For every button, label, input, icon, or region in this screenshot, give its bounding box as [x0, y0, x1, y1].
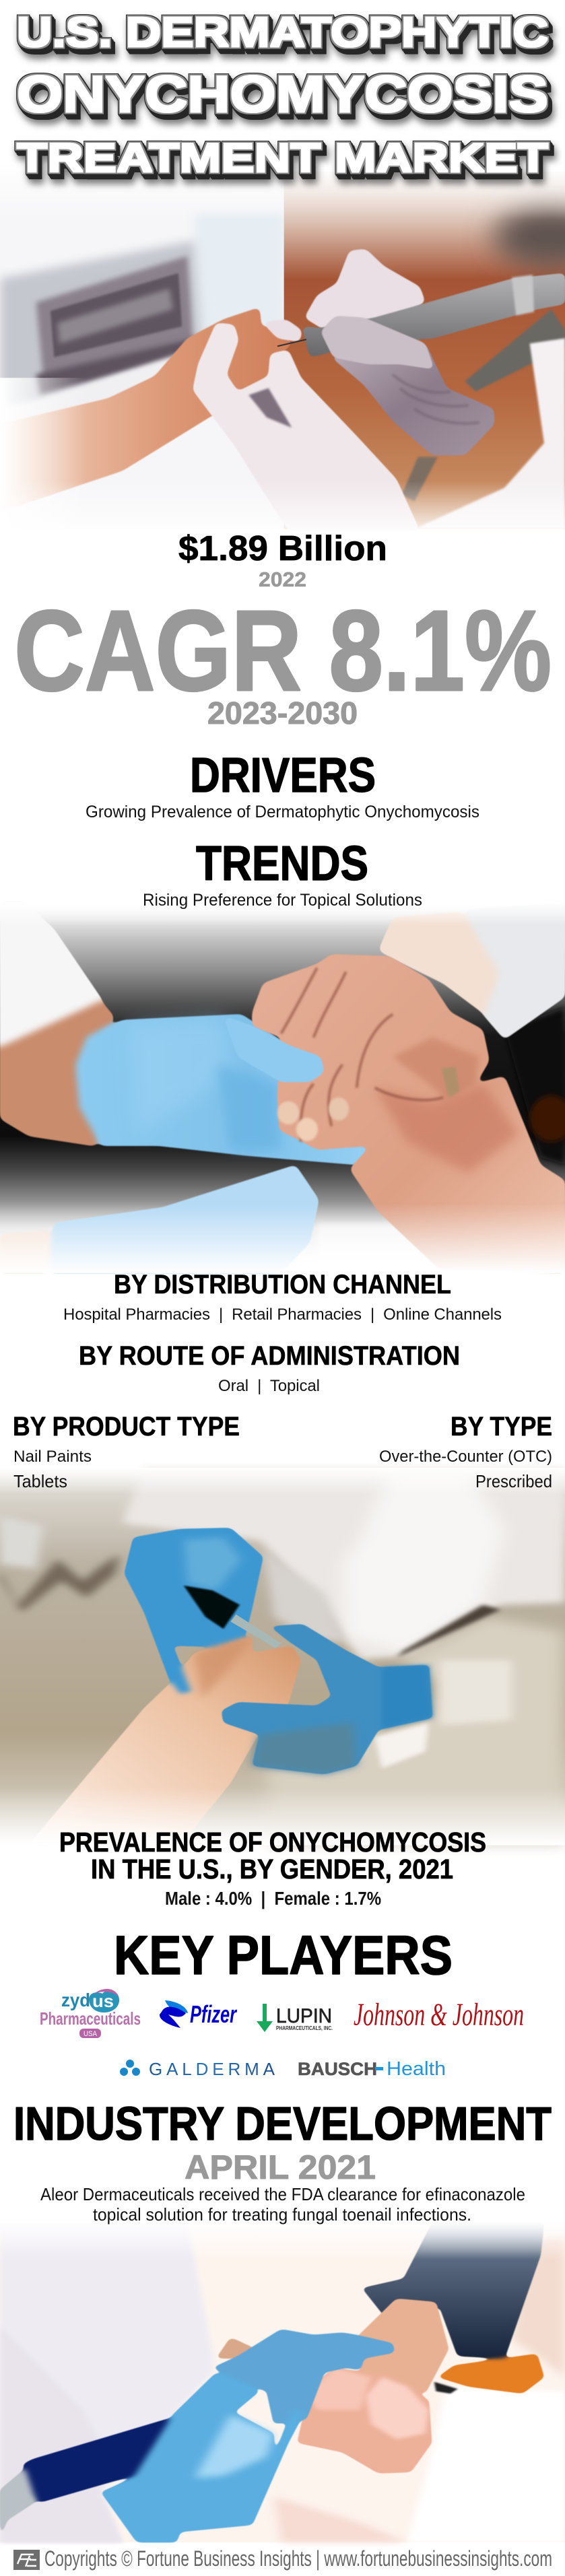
title: ONYCHOMYCOSIS — [17, 66, 548, 123]
logo: Bausch Health: BAUSCH — [298, 2059, 377, 2079]
prevalence block — [59, 1827, 486, 1909]
type heading: BY TYPE — [451, 1412, 552, 1442]
prescribed: Prescribed — [475, 1471, 552, 1491]
footer — [13, 2546, 552, 2571]
product type heading: BY PRODUCT TYPE — [13, 1412, 240, 1442]
logo: Zydus: zyd — [61, 1990, 90, 2010]
market size value: $1.89 Billion — [178, 529, 387, 568]
development description — [40, 2184, 525, 2225]
logo: Zydus: USA — [84, 2030, 98, 2038]
key players heading: KEY PLAYERS — [114, 1925, 453, 1986]
segment: by distribution channel — [63, 1270, 502, 1324]
logo: Zydus: us — [92, 1991, 114, 2011]
drivers heading: DRIVERS — [190, 749, 376, 803]
logo: Lupin: LUPIN — [276, 2005, 332, 2027]
photo: podiatrist drilling toenail with gloved hands — [0, 162, 565, 539]
development description: Aleor Dermaceuticals received the FDA clearance for efinaconazole — [40, 2184, 525, 2204]
logo: Pfizer — [160, 2000, 237, 2028]
title — [17, 9, 548, 180]
tablets: Tablets — [13, 1471, 67, 1491]
development date: APRIL 2021 — [185, 2148, 376, 2186]
distribution items: Hospital Pharmacies | Retail Pharmacies | Online Channels — [63, 1306, 502, 1324]
title: U.S. DERMATOPHYTIC — [17, 9, 548, 56]
development description: topical solution for treating fungal toenail infections. — [93, 2204, 471, 2225]
market size year: 2022 — [259, 568, 306, 591]
prevalence heading: IN THE U.S., BY GENDER, 2021 — [91, 1854, 453, 1885]
segment: by product type — [13, 1412, 240, 1491]
logo: Zydus — [40, 1989, 141, 2038]
drivers text: Growing Prevalence of Dermatophytic Onychomycosis — [86, 803, 479, 821]
footer logo — [13, 2550, 40, 2570]
prevalence values: Male : 4.0% | Female : 1.7% — [165, 1888, 381, 1909]
photo: blue gloved hands filing patient toe — [0, 2220, 565, 2542]
prevalence heading: PREVALENCE OF ONYCHOMYCOSIS — [59, 1827, 486, 1858]
nail paints: Nail Paints — [13, 1448, 92, 1466]
logo: Pfizer: Pfizer — [190, 2000, 237, 2028]
logo: Galderma: GALDERMA — [149, 2059, 275, 2079]
trends heading: TRENDS — [196, 837, 368, 891]
trends text: Rising Preference for Topical Solutions — [143, 891, 422, 910]
segment: by route of administration — [79, 1341, 460, 1395]
distribution heading: BY DISTRIBUTION CHANNEL — [114, 1270, 451, 1299]
over the counter: Over-the-Counter (OTC) — [379, 1448, 552, 1466]
photo: dropper applying solution to toenail — [0, 1468, 565, 1845]
route heading: BY ROUTE OF ADMINISTRATION — [79, 1341, 460, 1371]
logo: Lupin — [257, 2004, 333, 2032]
title: TREATMENT MARKET — [17, 135, 548, 180]
prevalence heading — [59, 1827, 486, 1885]
logo: Bausch Health: Health — [387, 2058, 446, 2080]
logo: Lupin: PHARMACEUTICALS, INC. — [276, 2025, 333, 2031]
CAGR period: 2023-2030 — [207, 696, 358, 731]
logo: Bausch Health — [298, 2058, 446, 2080]
segment: by type — [379, 1412, 552, 1491]
photo: blue gloved hands examining patient hand — [0, 902, 565, 1273]
route items: Oral | Topical — [218, 1377, 320, 1395]
logo: Zydus: Pharmaceuticals — [40, 2008, 141, 2029]
